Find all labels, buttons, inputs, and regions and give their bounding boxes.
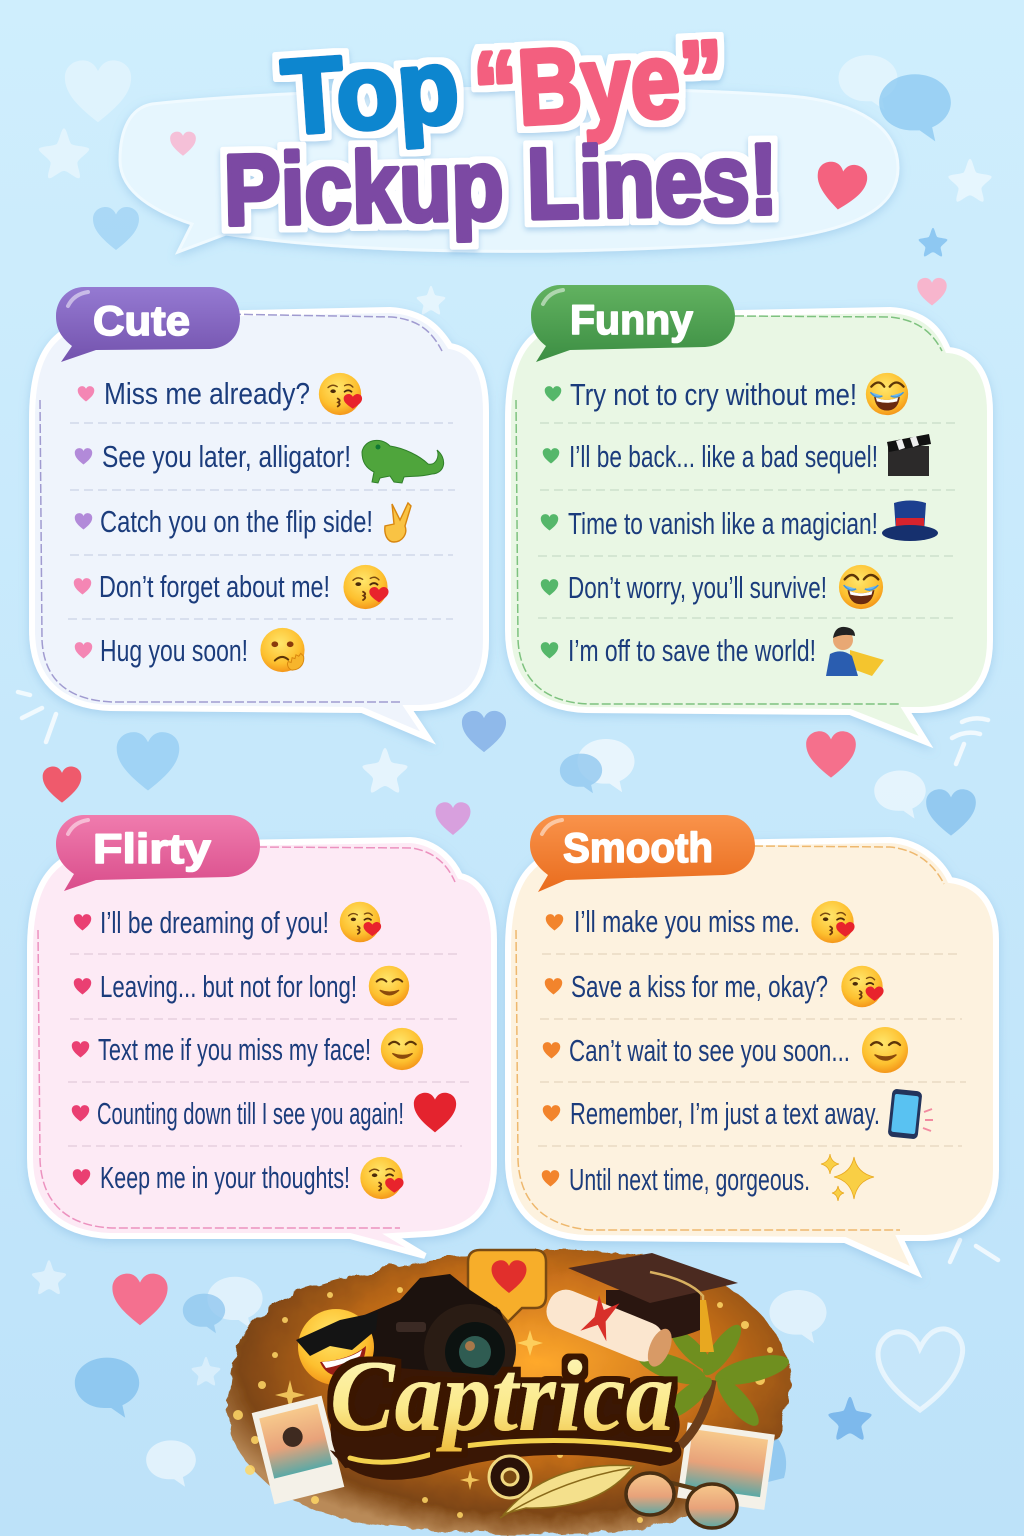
Smooth row dividers bbox=[538, 954, 966, 1146]
panel: Smooth bbox=[508, 815, 996, 1272]
Funny stitched border bbox=[516, 316, 942, 704]
icon: magician hat bbox=[882, 500, 938, 541]
Cute stitched border bbox=[40, 314, 442, 702]
logo sunglasses bbox=[626, 1473, 737, 1528]
Funny row dividers bbox=[538, 423, 960, 618]
icon: superhero bbox=[826, 627, 884, 676]
row: Catch you on the flip side!: Catch you on the flip side! bbox=[100, 504, 373, 539]
title: “Bye” bbox=[471, 19, 727, 150]
decorative banner hearts bbox=[170, 132, 869, 213]
row: Text me if you miss my face! bbox=[72, 1028, 423, 1070]
row: See you later, alligator! bbox=[75, 439, 444, 483]
panel: Flirty bbox=[30, 815, 494, 1256]
row: Miss me already?: Miss me already? bbox=[104, 376, 310, 411]
logo wordmark backing bbox=[331, 1366, 680, 1468]
row: Don't forget about me! bbox=[74, 565, 389, 609]
row: Can't wait to see you soon... bbox=[543, 1027, 908, 1073]
Cute badge bbox=[56, 287, 240, 362]
logo camera bbox=[362, 1274, 516, 1400]
title: Top bbox=[279, 27, 462, 157]
icon: sparkles bbox=[821, 1154, 874, 1201]
row: I'll make you miss me.: I’ll make you miss me. bbox=[574, 904, 800, 939]
row: Remember, I'm just a text away.: Remember, I’m just a text away. bbox=[570, 1096, 880, 1131]
Cute badge: Cute bbox=[93, 297, 190, 344]
icon: alligator bbox=[362, 440, 444, 483]
title: Pickup Lines! bbox=[223, 123, 779, 247]
row: Until next time, gorgeous.: Until next time, gorgeous. bbox=[569, 1162, 810, 1197]
row: Text me if you miss my face!: Text me if you miss my face! bbox=[98, 1032, 371, 1067]
row: Hug you soon! bbox=[75, 628, 305, 672]
row: Don't worry, you'll survive! bbox=[541, 565, 883, 609]
panel: Funny bbox=[508, 285, 990, 742]
icon: clapperboard bbox=[887, 434, 931, 476]
row: Don't forget about me!: Don’t forget about me! bbox=[99, 569, 330, 604]
row: Counting down till I see you again! bbox=[72, 1093, 456, 1132]
Funny badge: Funny bbox=[570, 296, 694, 343]
logo sunglasses emoji bbox=[296, 1309, 378, 1385]
Flirty card background bbox=[30, 840, 494, 1256]
Smooth badge: Smooth bbox=[563, 824, 713, 871]
Smooth badge bbox=[530, 815, 755, 892]
row: Counting down till I see you again!: Counting down till I see you again! bbox=[97, 1096, 404, 1131]
icon: phone bbox=[888, 1089, 933, 1139]
row: Don't worry, you'll survive!: Don’t worry, you’ll survive! bbox=[568, 570, 827, 605]
row: I'll be back... like a bad sequel!: I’ll be back... like a bad sequel! bbox=[569, 439, 878, 474]
Smooth stitched border bbox=[516, 846, 944, 1230]
logo right photo bbox=[677, 1422, 775, 1510]
logo badge background bbox=[228, 1249, 790, 1534]
Flirty badge bbox=[56, 815, 260, 891]
row: Until next time, gorgeous. bbox=[542, 1154, 874, 1201]
logo feather bbox=[500, 1465, 634, 1518]
row: I'm off to save the world! bbox=[541, 627, 884, 676]
row: Save a kiss for me, okay?: Save a kiss for me, okay? bbox=[571, 969, 828, 1004]
logo aperture icon bbox=[489, 1456, 531, 1498]
row: Leaving... but not for long!: Leaving... but not for long! bbox=[100, 969, 357, 1004]
row: Keep me in your thoughts!: Keep me in your thoughts! bbox=[100, 1160, 350, 1195]
logo diploma scroll bbox=[541, 1279, 679, 1370]
Funny badge bbox=[531, 285, 735, 362]
row: I'll be back... like a bad sequel! bbox=[543, 434, 931, 476]
logo chat heart icon bbox=[468, 1250, 546, 1322]
Flirty row dividers bbox=[68, 954, 470, 1146]
title banner speech bubble bbox=[120, 88, 898, 252]
Flirty badge: Flirty bbox=[93, 825, 212, 872]
logo swoosh bbox=[330, 1437, 681, 1480]
row: Hug you soon!: Hug you soon! bbox=[100, 633, 248, 668]
Funny card background bbox=[508, 310, 990, 742]
logo palm tree bbox=[634, 1320, 792, 1446]
icon: peace hand bbox=[385, 503, 411, 542]
Cute row dividers bbox=[68, 423, 455, 619]
row: Keep me in your thoughts! bbox=[73, 1157, 404, 1199]
row: Can't wait to see you soon...: Can’t wait to see you soon... bbox=[569, 1033, 850, 1068]
row: See you later, alligator!: See you later, alligator! bbox=[102, 439, 351, 474]
logo graduation cap bbox=[568, 1253, 738, 1352]
row: I'm off to save the world!: I’m off to save the world! bbox=[568, 633, 816, 668]
panel: Cute bbox=[32, 287, 486, 738]
logo swoosh highlight bbox=[350, 1440, 670, 1462]
row: Time to vanish like a magician!: Time to vanish like a magician! bbox=[568, 506, 878, 541]
Flirty stitched border bbox=[38, 847, 455, 1228]
Captrica logo bbox=[228, 1249, 792, 1534]
icon: red heart bbox=[414, 1093, 456, 1132]
row: Remember, I'm just a text away. bbox=[543, 1089, 933, 1139]
Cute card background bbox=[32, 310, 486, 738]
Smooth card background bbox=[508, 840, 996, 1272]
row: I'll be dreaming of you!: I’ll be dreaming of you! bbox=[100, 905, 329, 940]
row: Try not to cry without me!: Try not to cry without me! bbox=[570, 377, 857, 412]
title bbox=[223, 19, 779, 247]
logo wordmark: Captrica bbox=[330, 1340, 674, 1453]
logo left photo bbox=[252, 1396, 344, 1504]
